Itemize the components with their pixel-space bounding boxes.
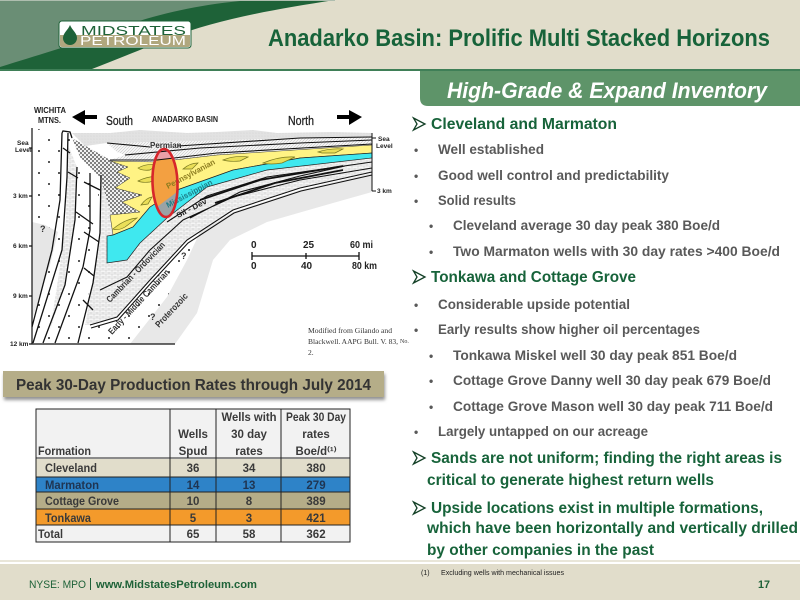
text block: Cleveland and Marmaton: Cleveland and Marmaton [431, 116, 617, 133]
row: Tonkawa: Tonkawa [45, 513, 92, 525]
text block: Cleveland and Marmaton: Good well control and predictability [438, 168, 669, 183]
icon: oil drop [63, 25, 77, 45]
text block: Tonkawa and Cottage Grove: Considerable upside potential [438, 297, 630, 312]
text block: Tonkawa and Cottage Grove: • [429, 400, 433, 414]
text block: Tonkawa and Cottage Grove: Largely untapped on our acreage [438, 424, 648, 439]
table header: Wells with [222, 412, 276, 424]
direction labels: South [106, 113, 133, 128]
text block: upside locations: by other companies in the past [427, 542, 654, 559]
row: Total: Total [38, 529, 63, 541]
text block: Tonkawa and Cottage Grove: • [414, 323, 418, 337]
row: Marmaton: Marmaton [45, 480, 99, 492]
depth labels: Level [15, 147, 32, 154]
table header: rates [302, 429, 330, 441]
text block: upside locations [414, 500, 798, 559]
table header: Spud [179, 446, 207, 458]
formation labels: Pennsylvanian [165, 157, 217, 191]
row: Tonkawa: 5 [190, 513, 197, 525]
footer ticker and website: www.MidstatesPetroleum.com [95, 579, 257, 591]
row: Total: 65 [187, 529, 200, 541]
table row fills [36, 409, 350, 542]
arrow: north [337, 110, 362, 125]
icon: arrow bullet [414, 118, 425, 130]
formation labels: Sil - Dev [175, 196, 209, 220]
footer band [0, 560, 800, 600]
text block: Cleveland and Marmaton: • [414, 169, 418, 183]
formation labels: ? [181, 251, 186, 261]
map source note: Blackwell. AAPG Bull. V. 83, [308, 337, 398, 346]
table header: rates [235, 446, 263, 458]
logo [59, 21, 191, 48]
table header: Boe/d⁽¹⁾ [296, 445, 337, 458]
formation labels: Proterozoic [153, 291, 190, 329]
row: Total: 362 [306, 529, 326, 541]
row: Tonkawa: 3 [246, 513, 252, 525]
scale bar: 0 [251, 261, 257, 272]
red target ellipse [151, 149, 179, 217]
depth scale right [372, 133, 376, 191]
text block: sands: Sands are not uniform; finding the right areas is [431, 450, 782, 467]
table caption: Peak 30-Day Production Rates through July 2014 [16, 377, 371, 394]
text block: Cleveland and Marmaton: • [414, 143, 418, 157]
scale bar: 25 [303, 240, 315, 251]
text block: Cleveland and Marmaton: Solid results [438, 193, 516, 208]
map source note: Modified from Gilando and [308, 326, 392, 335]
formation labels [40, 141, 217, 336]
text block: Cleveland and Marmaton [414, 116, 780, 259]
text block: Tonkawa and Cottage Grove: Early results show higher oil percentages [438, 322, 700, 337]
text block: Cleveland and Marmaton: Well established [438, 142, 544, 157]
footnote: (1) [421, 570, 430, 577]
footer ticker and website [29, 578, 257, 591]
text block: Tonkawa and Cottage Grove: Tonkawa Miskel well 30 day peak 851 Boe/d [453, 348, 737, 363]
direction labels: ANADARKO BASIN [152, 114, 218, 124]
icon: arrow bullet [414, 502, 425, 514]
text block: Cleveland and Marmaton: • [414, 194, 418, 208]
row: Marmaton: 13 [243, 480, 255, 492]
yellow pennsylvanian layer [110, 145, 372, 235]
depth labels: 9 km [13, 293, 28, 300]
row: Cleveland: 34 [243, 463, 256, 475]
text block: sands [414, 450, 782, 489]
depth labels: Level [376, 143, 393, 150]
text block: sands: critical to generate highest return wells [427, 472, 714, 489]
table header: Peak 30 Day [286, 412, 347, 424]
depth labels: 3 km [13, 193, 28, 200]
table header: Formation [38, 446, 91, 458]
row: Cleveland: 380 [306, 463, 326, 475]
text block: Tonkawa and Cottage Grove [414, 269, 773, 439]
proterozoic gray band [130, 173, 372, 344]
table caption [3, 371, 384, 397]
direction labels [34, 105, 314, 128]
row: Marmaton: 279 [306, 480, 326, 492]
formation labels: Permian [150, 141, 182, 150]
text block: upside locations: Upside locations exist in multiple formations, [431, 500, 763, 517]
depth labels: 12 km [10, 341, 29, 348]
text block: Tonkawa and Cottage Grove: • [414, 425, 418, 439]
text block: Cleveland and Marmaton: Two Marmaton wells with 30 day rates >400 Boe/d [453, 244, 780, 259]
depth labels [10, 136, 393, 348]
stippled wedge [72, 138, 142, 215]
map source note [308, 326, 409, 357]
text block: Tonkawa and Cottage Grove: • [414, 298, 418, 312]
scale bar [251, 240, 377, 272]
scale bar: 40 [301, 261, 313, 272]
icon: arrow bullet [414, 271, 425, 283]
icon: arrow bullet [414, 452, 425, 464]
text block: Cleveland and Marmaton: • [429, 219, 433, 233]
row: Cottage Grove: 8 [246, 496, 253, 508]
logo: MIDSTATES [81, 23, 186, 38]
direction labels: MTNS. [38, 115, 61, 125]
scale bar: 0 [251, 240, 257, 251]
text block: Tonkawa and Cottage Grove: Cottage Grove Mason well 30 day peak 711 Boe/d [453, 399, 773, 414]
header band [0, 0, 800, 71]
text block: upside locations: which have been horizontally and vertically drilled [426, 520, 798, 537]
depth labels: Sea [17, 140, 29, 147]
row: Cleveland: Cleveland [45, 463, 97, 475]
formation labels: ? [40, 224, 46, 234]
text block: Tonkawa and Cottage Grove: Tonkawa and Cottage Grove [431, 269, 636, 286]
direction labels: WICHITA [34, 105, 66, 115]
row: Marmaton: 14 [187, 480, 200, 492]
row: Total: 58 [243, 529, 256, 541]
row: Tonkawa [45, 513, 326, 525]
depth labels: 6 km [13, 243, 28, 250]
page number: 17 [758, 579, 770, 591]
table header: 30 day [231, 429, 268, 441]
row: Cottage Grove [45, 496, 326, 508]
text block: Cleveland and Marmaton: • [429, 245, 433, 259]
direction labels: North [288, 113, 314, 128]
formation labels: Early - Middle Cambrian [106, 267, 171, 336]
upper gray layer [72, 130, 372, 146]
footnote: Excluding wells with mechanical issues [441, 570, 565, 577]
depth labels: 3 km [377, 188, 392, 195]
section banner: High-Grade & Expand Inventory [447, 78, 769, 103]
row: Marmaton [45, 480, 326, 492]
depth scale left [29, 128, 175, 344]
arrow: south [72, 110, 97, 125]
section banner [420, 71, 800, 106]
table header [38, 412, 347, 458]
highlighted target zone [154, 150, 176, 216]
row: Cottage Grove: 10 [187, 496, 199, 508]
hatched layer [107, 137, 372, 162]
row: Cleveland: 36 [187, 463, 199, 475]
map source note: 2. [308, 348, 314, 357]
text block: Tonkawa and Cottage Grove: • [429, 349, 433, 363]
formation labels: Cambrian - Ordovician [104, 240, 167, 304]
row: Tonkawa: 421 [306, 513, 326, 525]
footer ticker and website: NYSE: MPO [29, 579, 86, 591]
limestone [72, 138, 372, 325]
production table [36, 409, 350, 542]
text block: Tonkawa and Cottage Grove: • [429, 374, 433, 388]
row: Cottage Grove: Cottage Grove [45, 496, 119, 508]
row: Cleveland [45, 463, 326, 475]
sand lenses [113, 149, 343, 230]
scale bar: 60 mi [350, 240, 373, 251]
text block: Cleveland and Marmaton: Cleveland average 30 day peak 380 Boe/d [453, 218, 720, 233]
table header: Wells [178, 429, 208, 441]
strata lines [90, 137, 372, 328]
depth labels: Sea [378, 136, 390, 143]
text block: Tonkawa and Cottage Grove: Cottage Grove Danny well 30 day peak 679 Boe/d [453, 373, 771, 388]
left gray unknown zone [32, 222, 58, 320]
row: Total [38, 529, 326, 541]
map source note: No. [400, 339, 409, 345]
fault curves [32, 131, 101, 343]
logo: PETROLEUM [80, 34, 186, 48]
formation labels: Mississippian [165, 178, 214, 210]
geological cross-section [10, 105, 409, 357]
formation labels: ? [150, 312, 156, 322]
scale bar: 80 km [352, 261, 377, 272]
row: Cottage Grove: 389 [306, 496, 326, 508]
cyan mississippian layer [107, 153, 372, 263]
dotted basement [32, 128, 205, 344]
